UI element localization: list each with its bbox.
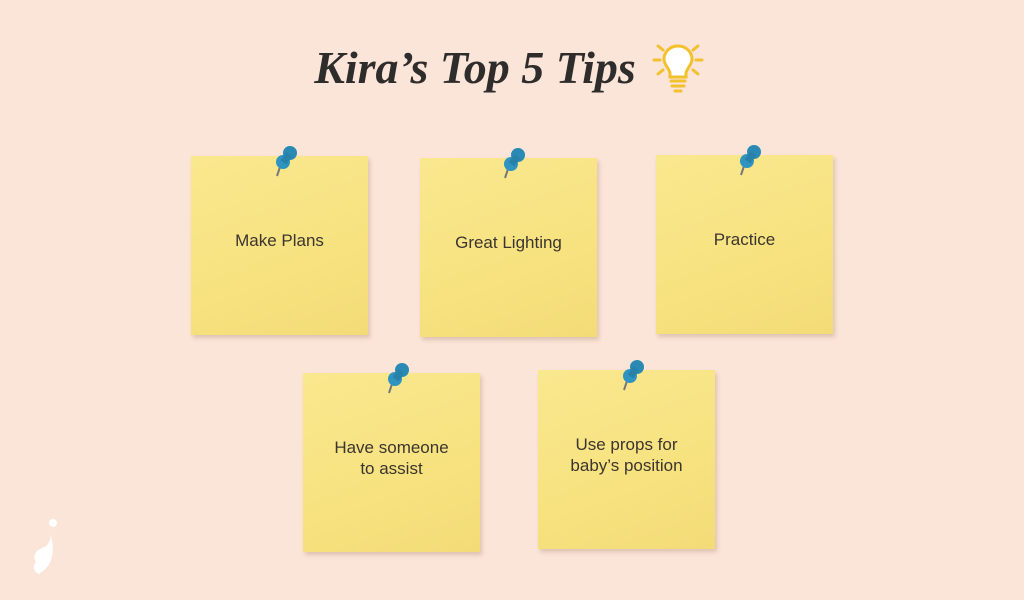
note: Use props: baby’s position [570, 456, 683, 474]
icon: pin 5 [623, 360, 644, 390]
note: Make Plans: Make Plans [235, 231, 324, 250]
note: Have someone to assist: to assist [360, 458, 423, 478]
note: Practice: Practice [714, 230, 775, 249]
note: Have someone to assist: Have someone [334, 438, 449, 456]
note: Make Plans [191, 156, 368, 335]
logo [34, 519, 57, 574]
icon: light bulb [652, 44, 704, 92]
note: Have someone to assist [303, 373, 480, 552]
note: Great Lighting [420, 158, 597, 337]
icon: pin 4 [388, 363, 409, 394]
title: Kira’s Top 5 Tips [314, 42, 636, 93]
icon: pin 3 [740, 145, 761, 176]
icon: pin 2 [504, 148, 525, 178]
note: Practice [656, 155, 833, 334]
icon: pin 1 [276, 146, 297, 176]
note: Use props: Use props for [575, 434, 678, 454]
note: Great Lighting: Great Lighting [455, 233, 562, 252]
note: Use props [538, 370, 715, 549]
